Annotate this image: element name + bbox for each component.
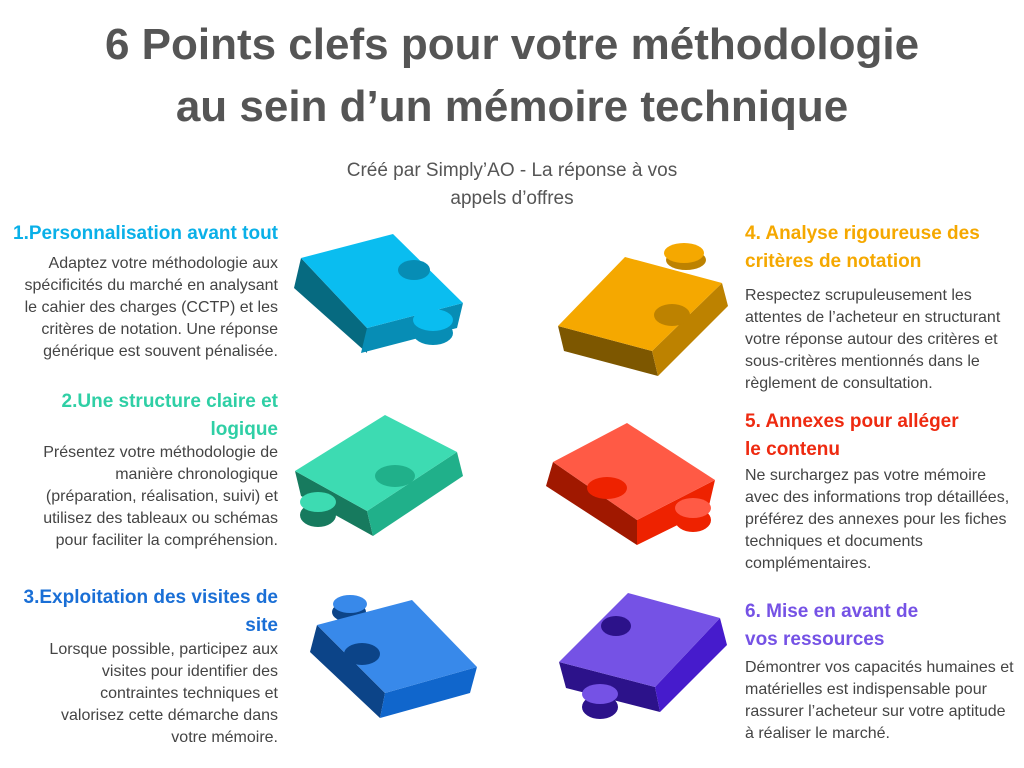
block 5: Ne surchargez pas votre mémoire bbox=[745, 467, 986, 484]
block 5: 5. Annexes pour alléger bbox=[745, 411, 959, 432]
block 6: Démontrer vos capacités humaines et bbox=[745, 659, 1014, 676]
block 4: 4. Analyse rigoureuse des bbox=[745, 223, 980, 244]
block 1: générique est souvent pénalisée. bbox=[43, 343, 278, 360]
title: au sein d’un mémoire technique bbox=[176, 82, 848, 131]
block 2: utilisez des tableaux ou schémas bbox=[43, 510, 278, 527]
block 3: Lorsque possible, participez aux bbox=[49, 641, 278, 658]
block 3: 3.Exploitation des visites de bbox=[24, 587, 278, 608]
block 2: pour faciliter la compréhension. bbox=[56, 532, 278, 549]
block 3: valorisez cette démarche dans bbox=[61, 707, 278, 724]
piece 1 cyan bbox=[294, 234, 463, 353]
piece 4 orange bbox=[558, 243, 728, 376]
block 6: rassurer l’acheteur sur votre aptitude bbox=[745, 703, 1006, 720]
block 5: complémentaires. bbox=[745, 555, 871, 572]
block 3 bbox=[24, 587, 278, 746]
block 4: critères de notation bbox=[745, 251, 921, 272]
block 2: manière chronologique bbox=[115, 466, 278, 483]
block 4: règlement de consultation. bbox=[745, 375, 933, 392]
block 5: techniques et documents bbox=[745, 533, 923, 550]
title: 6 Points clefs pour votre méthodologie bbox=[105, 20, 919, 69]
subtitle bbox=[347, 160, 677, 209]
piece 3 blue bbox=[310, 595, 477, 718]
block 2: logique bbox=[210, 419, 278, 440]
block 6: matérielles est indispensable pour bbox=[745, 681, 987, 698]
block 5: avec des informations trop détaillées, bbox=[745, 489, 1009, 506]
block 1: critères de notation. Une réponse bbox=[41, 321, 278, 338]
title bbox=[105, 20, 919, 131]
block 3: votre mémoire. bbox=[171, 729, 278, 746]
block 3: contraintes techniques et bbox=[100, 685, 278, 702]
block 4 bbox=[745, 223, 1000, 392]
block 4: attentes de l’acheteur en structurant bbox=[745, 309, 1000, 326]
block 3: site bbox=[245, 615, 278, 636]
block 3: visites pour identifier des bbox=[102, 663, 278, 680]
block 6 bbox=[745, 601, 1014, 742]
block 2: (préparation, réalisation, suivi) et bbox=[46, 488, 278, 505]
subtitle: Créé par Simply’AO - La réponse à vos bbox=[347, 160, 677, 181]
piece 6 purple bbox=[559, 593, 727, 719]
block 6: 6. Mise en avant de bbox=[745, 601, 918, 622]
block 1 bbox=[13, 223, 278, 360]
piece 5 red bbox=[546, 423, 715, 545]
block 4: sous-critères mentionnés dans le bbox=[745, 353, 980, 370]
block 5: le contenu bbox=[745, 439, 840, 460]
block 1: Adaptez votre méthodologie aux bbox=[49, 255, 278, 272]
block 6: à réaliser le marché. bbox=[745, 725, 890, 742]
block 5 bbox=[745, 411, 1009, 572]
block 1: le cahier des charges (CCTP) et les bbox=[25, 299, 278, 316]
block 4: votre réponse autour des critères et bbox=[745, 331, 998, 348]
block 6: vos ressources bbox=[745, 629, 884, 650]
piece 2 green bbox=[295, 415, 463, 536]
block 1: 1.Personnalisation avant tout bbox=[13, 223, 278, 244]
subtitle: appels d’offres bbox=[450, 188, 574, 209]
block 2 bbox=[43, 391, 278, 549]
block 2: 2.Une structure claire et bbox=[62, 391, 278, 412]
block 2: Présentez votre méthodologie de bbox=[43, 444, 278, 461]
block 4: Respectez scrupuleusement les bbox=[745, 287, 972, 304]
block 5: préférez des annexes pour les fiches bbox=[745, 511, 1006, 528]
block 1: spécificités du marché en analysant bbox=[25, 277, 278, 294]
